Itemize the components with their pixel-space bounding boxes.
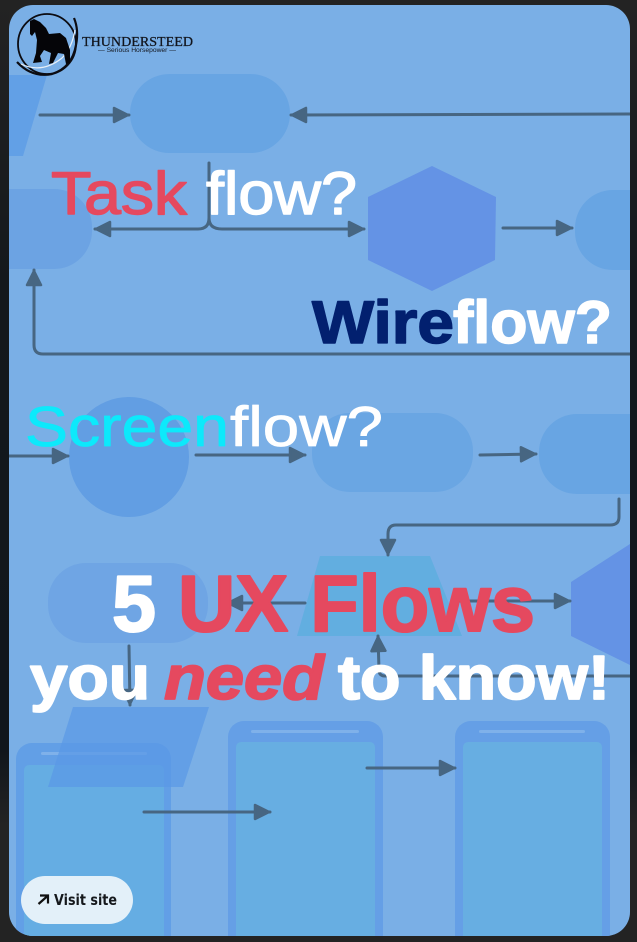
phone 3 xyxy=(455,721,610,942)
icon: external arrow xyxy=(38,896,48,904)
logo emblem xyxy=(17,14,77,75)
heading: Screenflow white part: flow? xyxy=(230,395,383,459)
arrows xyxy=(9,114,637,812)
logo xyxy=(17,14,193,75)
title line 1: UX Flows xyxy=(178,559,535,648)
title line 2 you: you xyxy=(30,644,150,713)
title line 2 to know: to know! xyxy=(338,644,610,713)
heading: Wireflow: Wire xyxy=(312,289,454,356)
phone 1 xyxy=(16,743,171,942)
title line 2 need: need xyxy=(164,644,325,713)
heading: Screenflow: Screen xyxy=(25,395,229,459)
heading: Wireflow white part: flow? xyxy=(453,289,612,356)
button: visit site: Visit site xyxy=(54,891,117,909)
title line 1 number: 5 xyxy=(112,559,156,648)
logo name: THUNDERSTEED xyxy=(82,34,193,49)
phone 2 xyxy=(228,721,383,942)
button: visit site xyxy=(21,876,133,924)
heading: Task flow white part: flow? xyxy=(206,160,357,227)
parallelogram xyxy=(48,707,209,787)
logo tagline: — Serious Horsepower — xyxy=(98,48,176,54)
flow shapes xyxy=(0,74,637,665)
heading: Task flow: Task xyxy=(51,160,188,227)
